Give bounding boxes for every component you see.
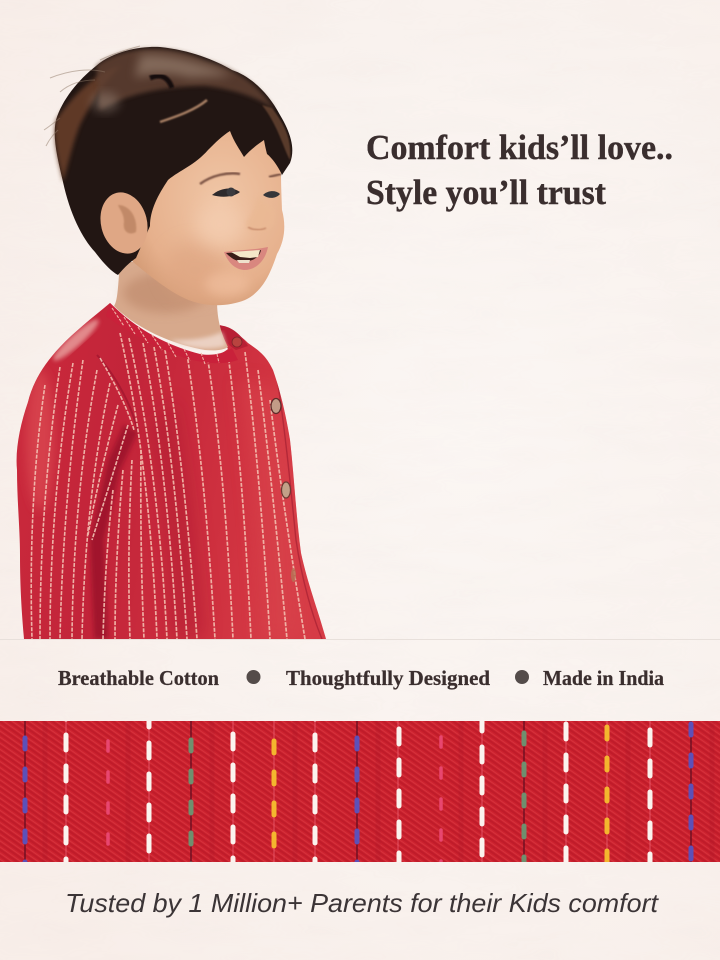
neck (114, 262, 228, 350)
kurta shirt (17, 303, 326, 639)
photo: smiling boy in red kurta (17, 46, 326, 639)
sleeve stitch stripes (31, 358, 134, 639)
heading: Comfort kids’ll love.. (366, 128, 673, 167)
separator dot 1 (246, 670, 260, 684)
collar (106, 303, 238, 363)
hair (44, 46, 292, 275)
body stitch stripes (103, 333, 305, 639)
white stitches (64, 721, 652, 862)
face (125, 128, 284, 305)
feature: breathable cotton: Breathable Cotton (58, 666, 219, 690)
ear (94, 187, 154, 259)
separator dot 2 (515, 670, 529, 684)
pink stitches (106, 735, 443, 862)
purple stitches (25, 724, 691, 880)
shoulder placket (216, 326, 248, 350)
feature: thoughtfully designed: Thoughtfully Designed (286, 666, 490, 690)
feature: made in india: Made in India (543, 666, 664, 690)
flyaway hair (44, 46, 140, 146)
heading (366, 128, 673, 212)
green stitches (191, 733, 524, 880)
trust tagline: Tusted by 1 Million+ Parents for their Kids comfort (65, 888, 660, 918)
feature strip (0, 640, 720, 690)
fabric swatch band (0, 721, 720, 862)
yellow stitches (274, 727, 607, 880)
eyes and brows (200, 173, 281, 198)
heading: Style you’ll trust (366, 173, 606, 212)
buttons (232, 337, 296, 582)
smile (224, 247, 268, 270)
nose (246, 195, 275, 230)
